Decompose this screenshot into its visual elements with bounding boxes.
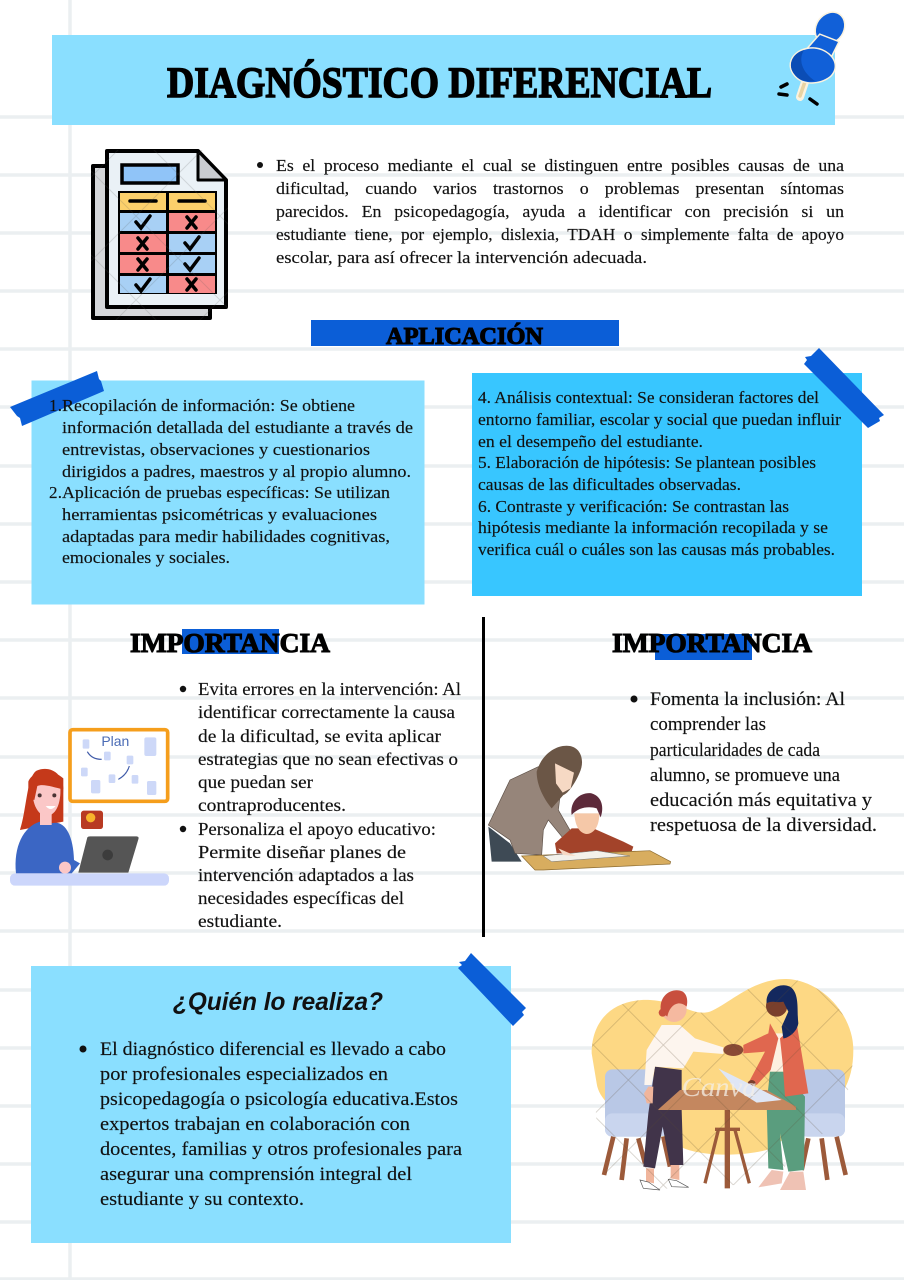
panel: steps 1-2: Recopilación de información: Se obtiene <box>62 396 355 415</box>
illustration: teacher helping student <box>488 746 671 870</box>
intro text block: estudiante tiene, por ejemplo, dislexia, TDAH o simplemente falta de apoyo <box>276 225 844 244</box>
intro text block: dificultad, cuando varios trastornos o problemas presentan síntomas <box>276 179 844 198</box>
panel: quién lo realiza: estudiante y su contexto. <box>100 1189 304 1210</box>
panel: steps 4-6: causas de las dificultades observadas. <box>478 475 741 494</box>
icon: checklist document <box>91 150 228 320</box>
title banner <box>52 35 835 125</box>
list: importancia left: Personaliza el apoyo educativo: <box>198 819 436 839</box>
panel: steps 4-6: hipótesis mediante la información recopilada y se <box>478 518 828 537</box>
list: importancia right: alumno, se promueve una <box>650 765 841 786</box>
list: importancia left: contraproducentes. <box>198 795 346 815</box>
panel: steps 1-2: emocionales y sociales. <box>62 548 230 567</box>
list: importancia left: estrategias que no sean efectivas o <box>198 749 458 769</box>
illustration: woman planning at laptop <box>10 730 169 886</box>
divider <box>482 617 485 937</box>
illustration: woman planning at laptop: Plan <box>101 733 129 749</box>
list: importancia right: Fomenta la inclusión: Al <box>650 689 845 710</box>
intro text block: parecidos. En psicopedagogía, ayuda a identificar con precisión si un <box>276 202 845 221</box>
list: importancia left: intervención adaptados a las <box>198 865 414 885</box>
list: importancia left: estudiante. <box>198 911 282 931</box>
tape: left panel <box>10 371 104 426</box>
heading: aplicación <box>311 320 619 350</box>
watermark text: Canva <box>682 1072 757 1102</box>
panel: steps 1-2: 2. <box>49 483 62 502</box>
panel: steps 4-6: 4. Análisis contextual: Se consideran factores del <box>478 388 819 407</box>
list: importancia left: Permite diseñar planes de <box>198 842 406 862</box>
panel: quién lo realiza: por profesionales especializados en <box>100 1064 389 1085</box>
tape: bottom panel <box>458 953 526 1026</box>
list: importancia left <box>180 679 461 931</box>
panel: quién lo realiza: psicopedagogía o psicología educativa.Estos <box>100 1089 458 1110</box>
list: importancia right: educación más equitativa y <box>650 790 873 811</box>
list: importancia right: respetuosa de la diversidad. <box>650 815 877 836</box>
list: importancia left: identificar correctamente la causa <box>198 702 455 722</box>
illustration: professionals shaking hands <box>580 977 860 1193</box>
panel: quién lo realiza <box>31 953 526 1243</box>
list: importancia left: Evita errores en la intervención: Al <box>198 679 461 699</box>
panel: steps 4-6: 5. Elaboración de hipótesis: Se plantean posibles <box>478 453 816 472</box>
panel: steps 1-2: entrevistas, observaciones y cuestionarios <box>62 440 370 459</box>
panel: steps 4-6: verifica cuál o cuáles son las causas más probables. <box>478 540 835 559</box>
list: importancia right <box>630 689 877 836</box>
panel: steps 1-2: herramientas psicométricas y evaluaciones <box>62 505 377 524</box>
heading: importancia right: IMPORTANCIA <box>612 628 813 658</box>
panel: steps 1-2: información detallada del estudiante a través de <box>62 418 413 437</box>
panel: steps 1-2 <box>10 371 424 604</box>
panel: steps 1-2: Aplicación de pruebas específicas: Se utilizan <box>62 483 391 502</box>
tape: right panel <box>804 348 884 428</box>
panel: steps 4-6: 6. Contraste y verificación: Se contrastan las <box>478 497 789 516</box>
panel: quién lo realiza: expertos trabajan en colaboración con <box>100 1114 411 1135</box>
icon: push pin <box>779 7 850 104</box>
heading: aplicación: APLICACIÓN <box>386 323 544 350</box>
panel: quién lo realiza: El diagnóstico diferencial es llevado a cabo <box>100 1039 446 1060</box>
list: importancia right: particularidades de cada <box>650 740 821 761</box>
list: importancia left: de la dificultad, se evita aplicar <box>198 726 441 746</box>
panel: steps 1-2: dirigidos a padres, maestros y al propio alumno. <box>62 462 411 481</box>
intro text block: escolar, para así ofrecer la intervención adecuada. <box>276 248 647 267</box>
list: importancia left: que puedan ser <box>198 772 313 792</box>
panel: quién lo realiza: docentes, familias y otros profesionales para <box>100 1139 463 1160</box>
panel: steps 4-6: entorno familiar, escolar y social que puedan influir <box>478 410 841 429</box>
panel: steps 1-2: 1. <box>49 396 62 415</box>
panel: quién lo realiza: asegurar una comprensión integral del <box>100 1164 412 1185</box>
heading: quién lo realiza: ¿Quién lo realiza? <box>173 988 383 1016</box>
panel: steps 4-6 <box>472 348 884 596</box>
panel: steps 1-2: adaptadas para medir habilidades cognitivas, <box>62 527 390 546</box>
intro text block <box>257 156 845 267</box>
list: importancia left: necesidades específicas del <box>198 888 404 908</box>
heading: importancia left: IMPORTANCIA <box>130 628 331 658</box>
panel: steps 4-6: en el desempeño del estudiante. <box>478 432 703 451</box>
intro text block: Es el proceso mediante el cual se distinguen entre posibles causas de una <box>276 156 844 175</box>
list: importancia right: comprender las <box>650 714 766 735</box>
title: DIAGNÓSTICO DIFERENCIAL <box>167 60 712 107</box>
